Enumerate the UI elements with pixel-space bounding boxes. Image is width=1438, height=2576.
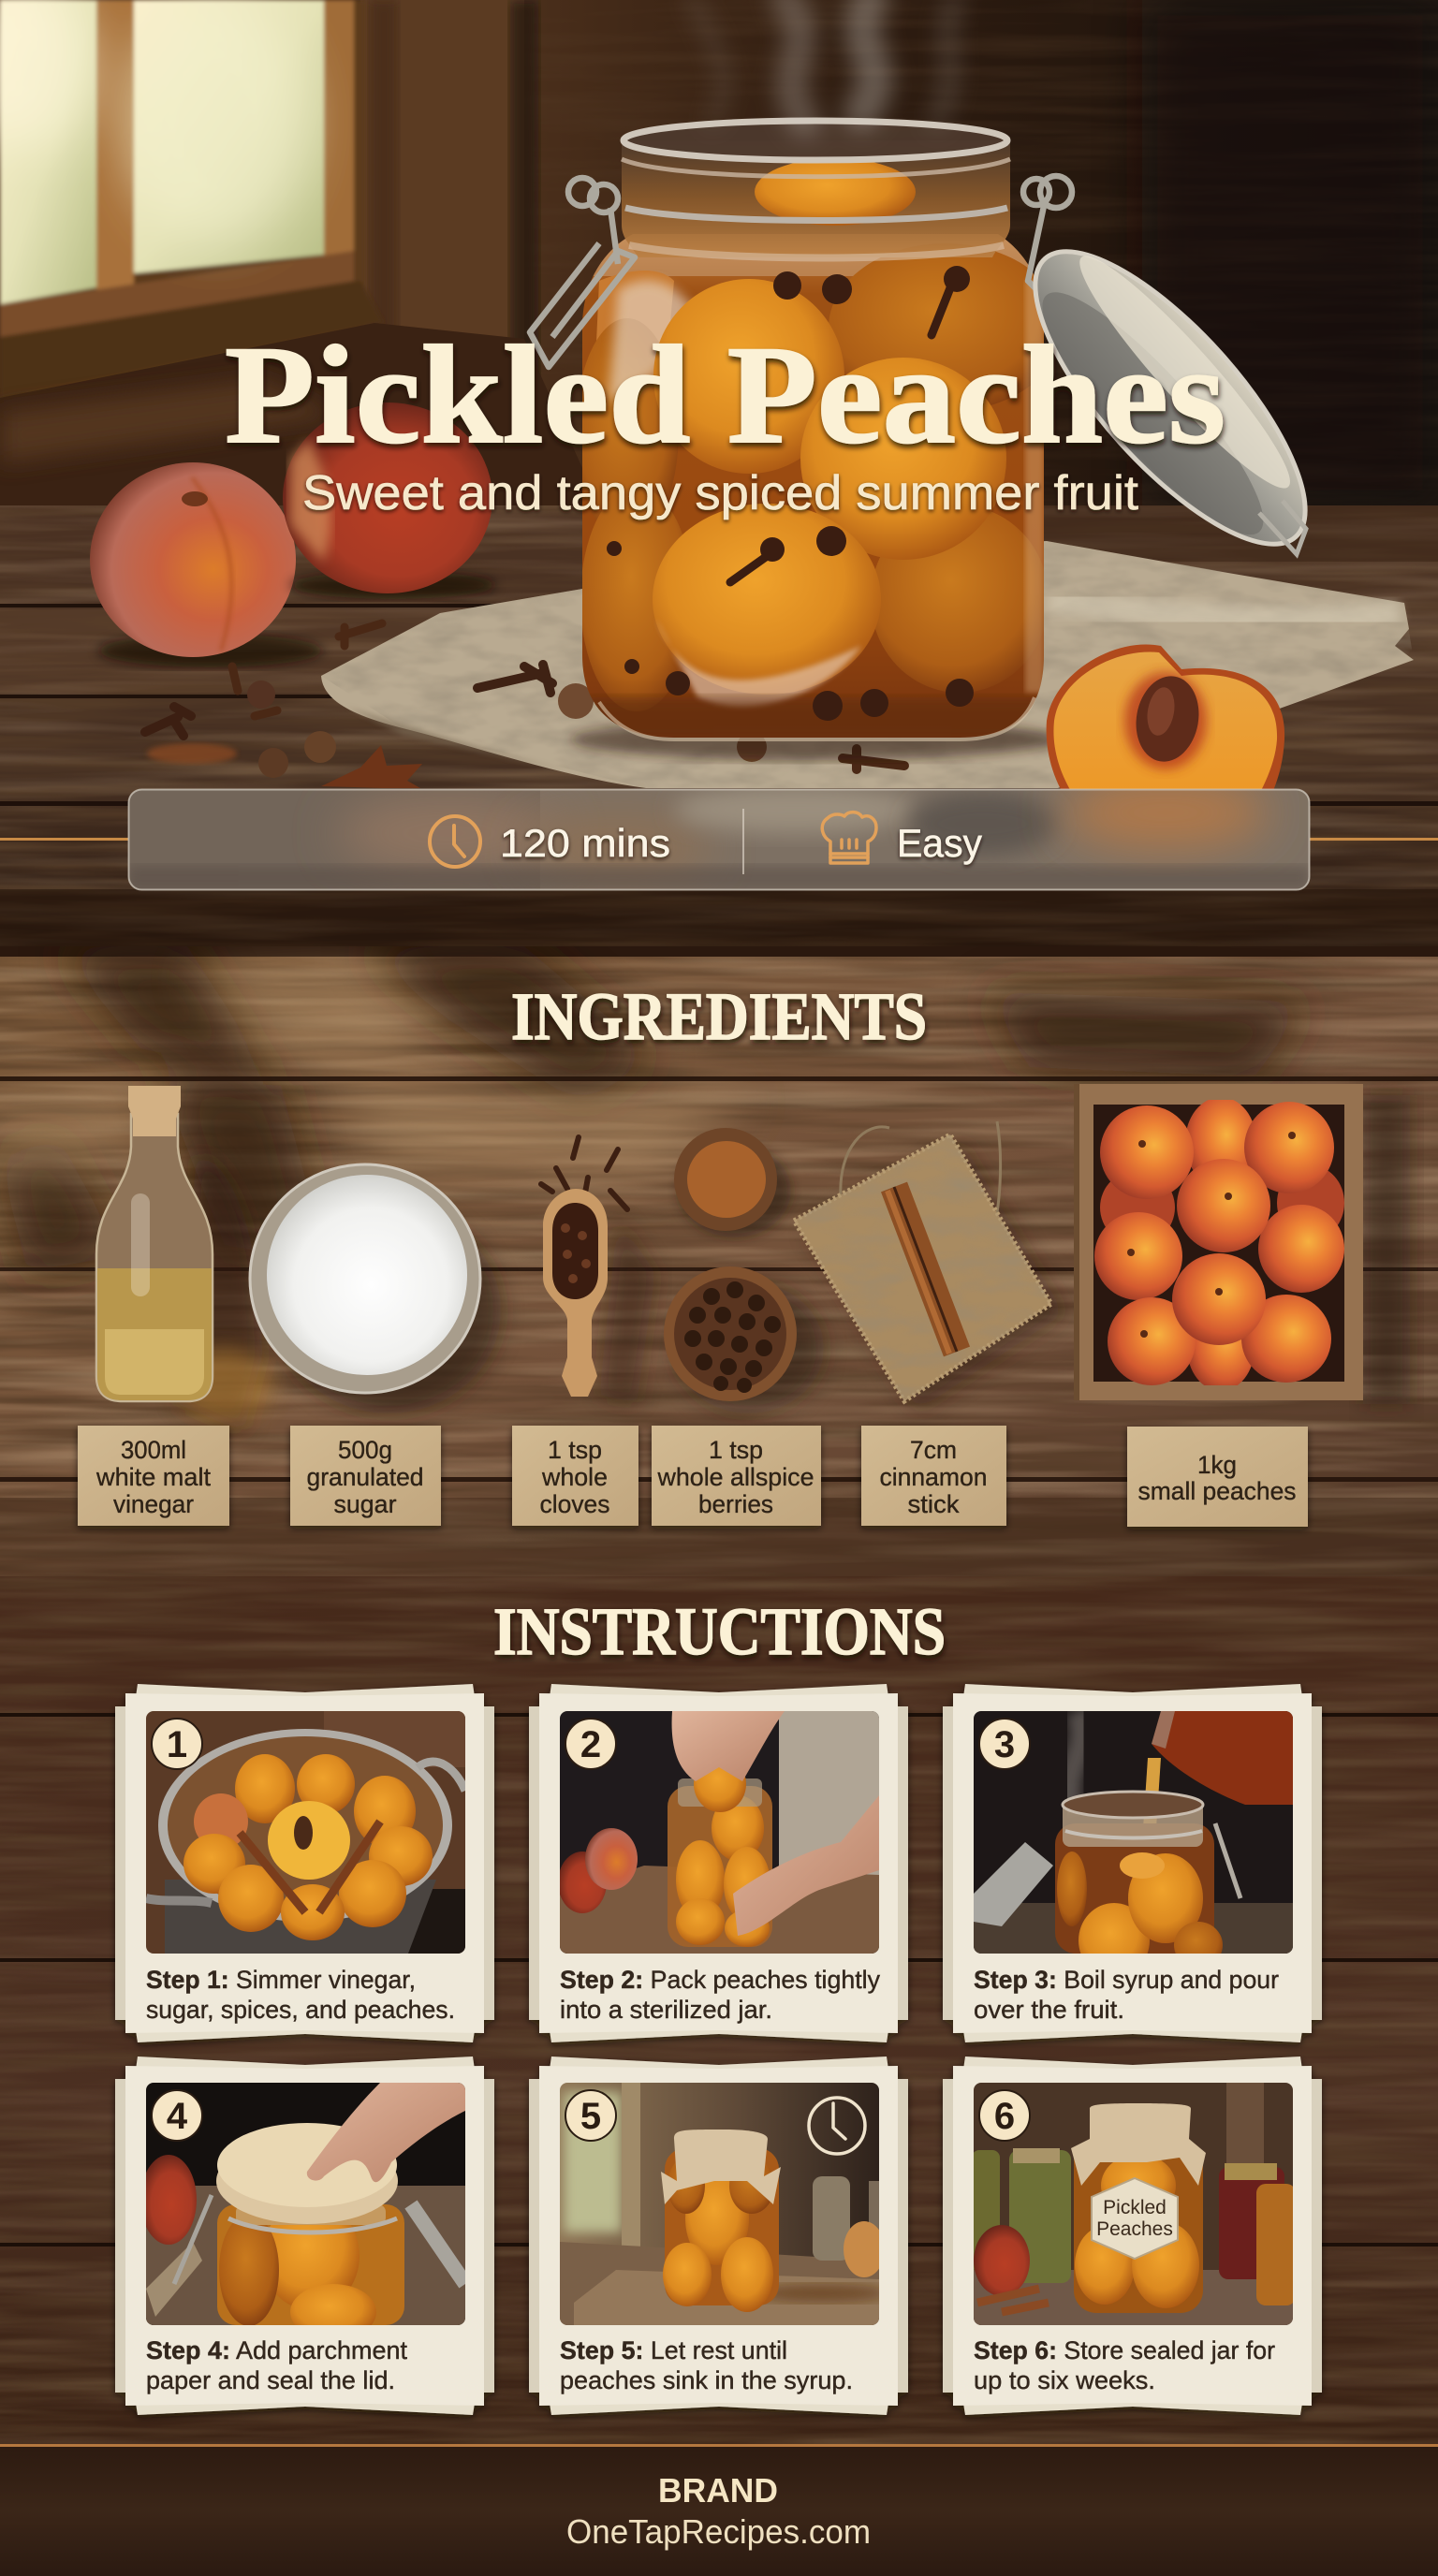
badge 4 — [152, 2090, 202, 2141]
photo: packing jar — [558, 1711, 879, 1954]
badge 2 — [565, 1719, 616, 1769]
rising steam — [693, 0, 955, 122]
card: step 6: up to six weeks. — [974, 2366, 1155, 2394]
open lid — [995, 213, 1345, 582]
scoop of cloves — [541, 1137, 655, 1404]
panel: instructions — [0, 1576, 1438, 2445]
step 5 text: Step 5: Let rest until — [560, 2336, 787, 2364]
ingredient label 4 — [652, 1426, 821, 1526]
crate of peaches — [1074, 1084, 1410, 1404]
badge 1 — [152, 1719, 202, 1769]
photo: pouring syrup — [974, 1711, 1293, 1978]
wire clamps — [530, 176, 1072, 367]
footer — [0, 2444, 1438, 2576]
step 6 text: Step 6: Store sealed jar for — [974, 2336, 1275, 2364]
bottle of vinegar — [96, 1086, 271, 1432]
ingredient label 5: stick — [908, 1490, 960, 1518]
card: step 3 — [943, 1684, 1322, 2042]
icon: chef hat — [822, 812, 876, 863]
badge 3: 3 — [994, 1724, 1015, 1765]
badge 5: 5 — [580, 2096, 601, 2137]
ingredient label 3 — [512, 1426, 638, 1526]
brand name: BRAND — [658, 2471, 778, 2510]
window — [0, 0, 384, 398]
cooking time: 120 mins — [500, 821, 670, 865]
badge 1: 1 — [167, 1724, 187, 1765]
step 2 text: Step 2: Pack peaches tightly — [560, 1966, 880, 1994]
icon: clock — [430, 816, 480, 867]
peach left front — [90, 462, 323, 667]
linen cloth — [321, 541, 1414, 788]
peaches in syrup — [576, 234, 1063, 739]
bowl of sugar — [250, 1164, 501, 1413]
subtitle: Sweet and tangy spiced summer fruit — [302, 466, 1139, 520]
ingredient label 2: 500g — [338, 1436, 392, 1464]
ingredient label 2 — [290, 1426, 441, 1526]
card: step 1: sugar, spices, and peaches. — [146, 1996, 455, 2024]
ingredient label 6: small peaches — [1138, 1477, 1296, 1505]
ingredient label 1 — [78, 1426, 229, 1526]
card: step 3: over the fruit. — [974, 1996, 1124, 2024]
step 3 text: Step 3: Boil syrup and pour — [974, 1966, 1279, 1994]
badge 6 — [979, 2090, 1030, 2141]
photo: storing jars: Peaches — [1096, 2218, 1173, 2240]
card: step 4: paper and seal the lid. — [146, 2366, 395, 2394]
bowl of allspice berries — [664, 1266, 824, 1413]
card: step 5 — [529, 2056, 908, 2415]
spices on table — [145, 623, 422, 788]
ingredient label 5 — [861, 1426, 1006, 1526]
ingredient label 6: 1kg — [1197, 1451, 1237, 1479]
jar neck and rim — [622, 121, 1010, 258]
badge 6: 6 — [994, 2096, 1015, 2137]
ingredient label 4: 1 tsp — [709, 1436, 763, 1464]
panel: ingredients — [0, 946, 1438, 1576]
ingredient label 1: 300ml — [121, 1436, 186, 1464]
burlap with cinnamon stick — [794, 1121, 1064, 1411]
card: step 6 — [943, 2056, 1322, 2415]
badge 5 — [565, 2090, 616, 2141]
card: step 2: into a sterilized jar. — [560, 1996, 772, 2024]
ingredient label 3: 1 tsp — [548, 1436, 602, 1464]
title: Pickled Peaches — [225, 317, 1225, 473]
badge 3 — [979, 1719, 1030, 1769]
wooden table — [0, 505, 1438, 946]
info bar: time and difficulty — [128, 777, 1310, 890]
cloves on cloth — [477, 665, 904, 769]
card: step 2 — [529, 1684, 908, 2042]
glass jar with peaches — [530, 121, 1345, 760]
card: step 1 — [115, 1684, 494, 2042]
heading: instructions: INSTRUCTIONS — [493, 1594, 946, 1669]
difficulty: Easy — [897, 821, 982, 865]
ingredient label 1: vinegar — [113, 1490, 194, 1518]
ingredient label 4: whole allspice — [657, 1463, 814, 1491]
badge 2: 2 — [580, 1724, 601, 1765]
website: OneTapRecipes.com — [566, 2512, 871, 2551]
ingredient label 5: 7cm — [910, 1436, 957, 1464]
ingredient label 3: cloves — [539, 1490, 610, 1518]
hero photo background — [0, 0, 1438, 946]
step 1 text: Step 1: Simmer vinegar, — [146, 1966, 416, 1994]
photo: storing jars — [972, 2083, 1296, 2325]
ingredient label 2: sugar — [333, 1490, 397, 1518]
jar body — [582, 234, 1044, 738]
photo: storing jars: Pickled — [1103, 2197, 1167, 2218]
photo: sealing with parchment — [140, 2083, 465, 2340]
cut peach half — [1047, 644, 1284, 824]
ingredient label 1: white malt — [95, 1463, 211, 1491]
ingredient label 5: cinnamon — [880, 1463, 987, 1491]
ingredient label 4: berries — [698, 1490, 773, 1518]
ingredient label 3: whole — [541, 1463, 608, 1491]
ingredient label 2: granulated — [307, 1463, 423, 1491]
photo: jar resting — [560, 2083, 888, 2325]
card: step 5: peaches sink in the syrup. — [560, 2366, 853, 2394]
peach left back — [283, 402, 496, 599]
ingredient label 6 — [1127, 1427, 1308, 1527]
photo: simmering pot — [146, 1711, 465, 1954]
decorative copper line — [0, 838, 1438, 841]
heading: ingredients: INGREDIENTS — [511, 979, 927, 1054]
bowl of ground cinnamon — [674, 1128, 791, 1237]
card: step 4 — [115, 2056, 494, 2415]
badge 4: 4 — [167, 2096, 188, 2137]
step 4 text: Step 4: Add parchment — [146, 2336, 407, 2364]
